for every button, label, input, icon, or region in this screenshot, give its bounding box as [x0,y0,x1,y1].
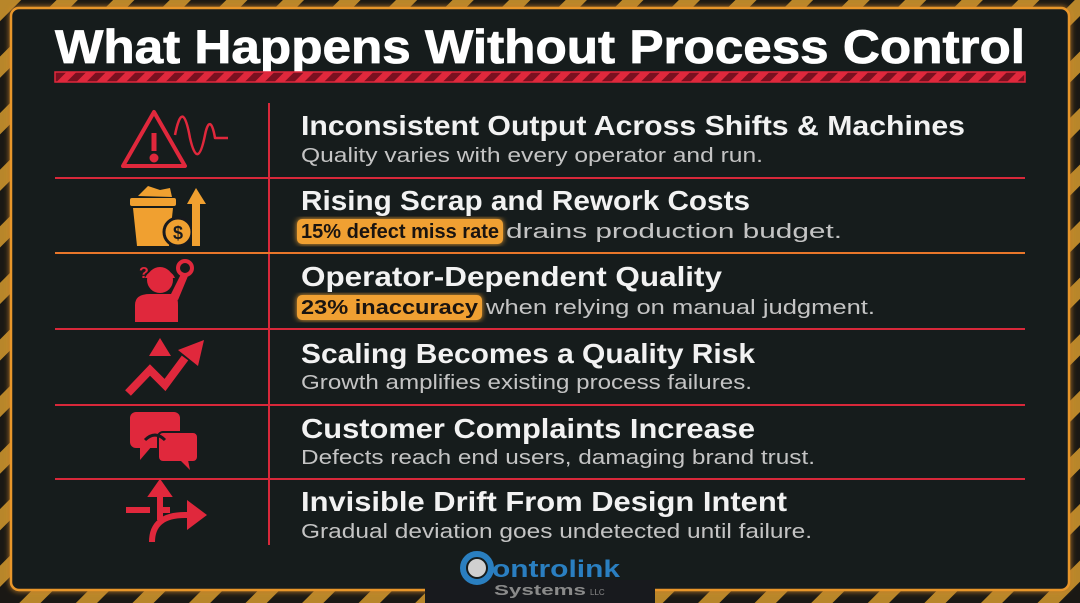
icon: scaling risk arrow [128,338,204,393]
row 1 text: Inconsistent Output Across Shifts & Machines [301,110,965,141]
icon: warning with wave [123,112,228,166]
icon: trash and money arrow: $ [173,223,183,243]
row dividers [55,178,1025,479]
title: What Happens Without Process Control [55,20,1025,73]
row 5 text: Customer Complaints Increase [301,413,755,444]
icon: confused operator [135,261,192,322]
row 4 text: Scaling Becomes a Quality Risk [301,338,755,369]
row 2 text: Rising Scrap and Rework Costs [301,185,750,216]
row 2 text: 15% defect miss rate [301,221,499,243]
row 1 text: Quality varies with every operator and run. [301,145,763,167]
title underline hazard bar [55,72,1025,82]
row 3 text [297,261,875,320]
logo: Controlink Systems [463,554,621,599]
row 2 text [297,185,842,244]
row 6 text: Invisible Drift From Design Intent [301,486,787,517]
row 3 text: Operator-Dependent Quality [301,261,722,292]
logo: Controlink Systems: LLC [590,588,605,597]
icon: trash and money arrow [130,186,206,246]
row 1 text [301,110,965,167]
highlight: 23% [297,295,482,320]
row 3 text: 23% inaccuracy [301,297,479,319]
row 6 text: Gradual deviation goes undetected until failure. [301,521,812,543]
row 5 text: Defects reach end users, damaging brand trust. [301,447,815,469]
logo: Controlink Systems: ontrolink [492,556,621,583]
vertical divider [268,103,270,545]
highlight: 15% [297,219,503,244]
icon: confused operator: ? [139,265,149,282]
row 3 text: when relying on manual judgment. [485,297,875,319]
row 4 text: Growth amplifies existing process failures. [301,372,752,394]
row 5 text [301,413,815,469]
icon: complaints speech bubbles [130,412,198,470]
icon: drift arrows [126,484,202,542]
row 4 text [301,338,755,394]
logo: Controlink Systems: Systems [494,582,586,599]
row 2 text: drains production budget. [506,221,842,243]
row 6 text [301,486,812,543]
